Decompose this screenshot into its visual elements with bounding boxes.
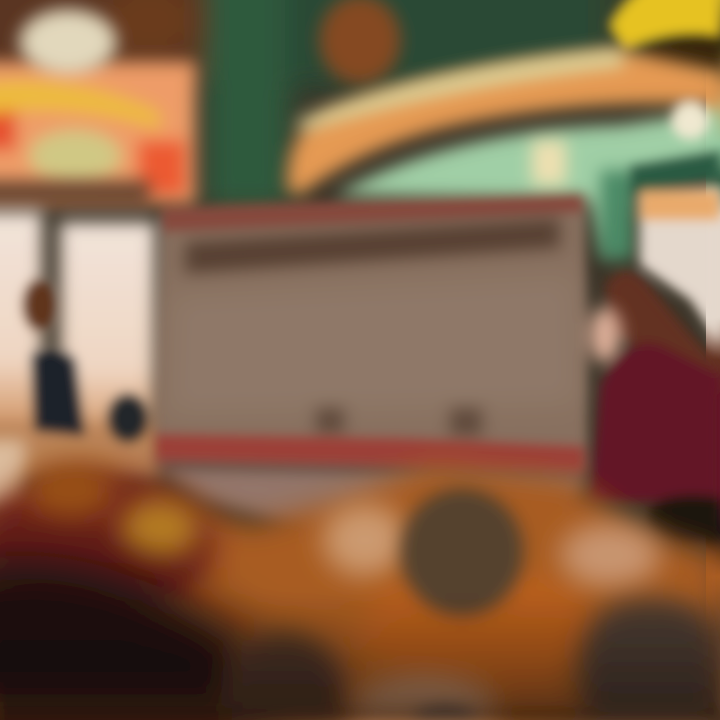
bottom vignette (0, 590, 720, 720)
left sign (0, 62, 195, 204)
left dark foreground (0, 557, 250, 720)
board header band (162, 193, 584, 232)
person on left (23, 279, 148, 442)
cream spot centre (532, 140, 566, 185)
centre orange glow (360, 570, 600, 690)
left audience member red (0, 473, 215, 617)
pale right shoulder (560, 523, 660, 587)
orange highlight left (25, 462, 115, 518)
presenter body (590, 343, 720, 505)
audience (0, 462, 720, 720)
pale shoulder (323, 504, 407, 576)
pale bottom shape (355, 675, 495, 720)
board bottom red band (155, 434, 585, 475)
right edge backing (706, 0, 720, 720)
bottom centre head (413, 704, 477, 720)
lower right head (578, 598, 720, 720)
presenter hair (605, 270, 720, 395)
left white panels (0, 212, 160, 480)
lower left head (225, 630, 345, 720)
green pillar right (600, 170, 634, 260)
mint green band (335, 110, 720, 260)
orange oval decoration (320, 0, 400, 84)
central board (155, 193, 588, 475)
centre head (400, 488, 524, 616)
audience base (0, 465, 720, 720)
left edge light (0, 440, 25, 510)
orange panel top (640, 190, 720, 220)
cream spot right (671, 101, 709, 139)
dark green strip right (630, 150, 720, 195)
yellow shape top right (610, 0, 720, 50)
brown decoration top left (105, 0, 195, 55)
bottom edge backing (0, 706, 720, 720)
right white panel (640, 187, 720, 345)
orange arc banner (288, 50, 720, 195)
board heading blur (185, 218, 560, 274)
cream arc highlight (300, 50, 625, 132)
dark sign base strip (0, 180, 150, 206)
upper backdrop (0, 0, 720, 210)
dark shape under yellow (640, 36, 720, 72)
lower board shadow (150, 465, 590, 535)
white dome on sign (20, 10, 116, 74)
board panel (155, 195, 588, 470)
presenter on right (589, 270, 720, 505)
board footer marks (316, 408, 482, 436)
dark object on right (645, 496, 720, 544)
presenter face (589, 307, 621, 363)
board content texture (185, 292, 599, 398)
yellow highlight (120, 498, 200, 558)
